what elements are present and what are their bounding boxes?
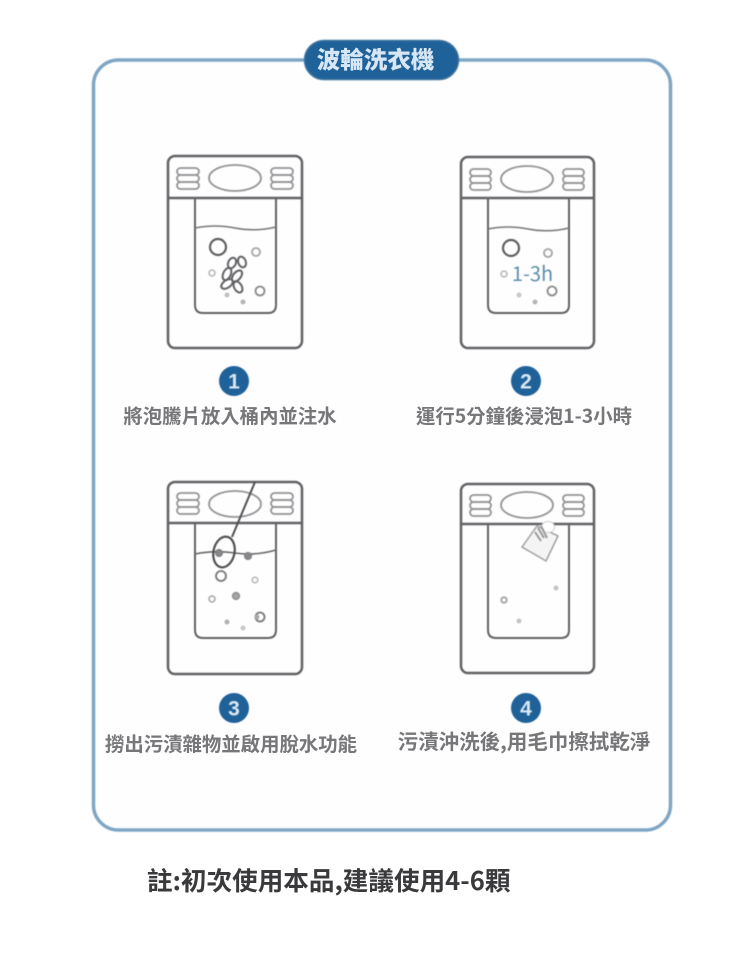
title: 波輪洗衣機	[317, 41, 434, 75]
washer 1	[168, 156, 302, 348]
washer 4	[461, 484, 594, 673]
panel: rounded frame	[94, 60, 670, 830]
step badge 2: 2	[520, 370, 532, 394]
label: duration: 1-3h	[512, 258, 553, 287]
heading pill	[304, 40, 458, 80]
caption 2: 運行5分鐘後浸泡1-3小時	[416, 400, 632, 429]
washer 2	[461, 157, 594, 348]
step badge 1	[219, 366, 249, 396]
caption 4: 污漬沖洗後,用毛巾擦拭乾淨	[398, 725, 650, 755]
step badge 3	[219, 693, 249, 723]
caption 3: 撈出污漬雜物並啟用脫水功能	[105, 728, 357, 757]
footnote: 註:初次使用本品,建議使用4-6顆	[147, 861, 510, 898]
caption 1: 將泡騰片放入桶內並注水	[123, 400, 337, 429]
washer 3	[168, 482, 302, 674]
step badge 2	[511, 366, 541, 396]
step badge 1: 1	[228, 370, 240, 394]
step badge 4	[511, 693, 541, 723]
icon: towel and hand	[522, 522, 558, 561]
step badge 3: 3	[228, 698, 240, 720]
step badge 4: 4	[520, 698, 532, 720]
